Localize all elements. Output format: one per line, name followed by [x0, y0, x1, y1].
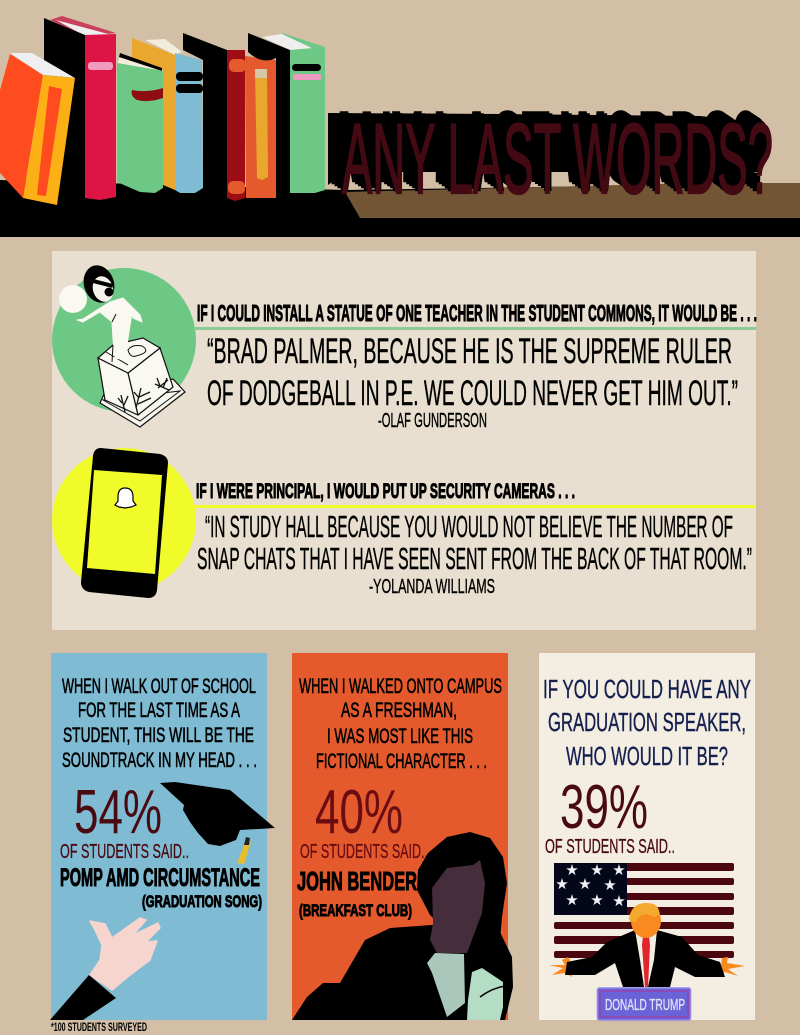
- footnote: *100 STUDENTS SURVEYED: [51, 1020, 147, 1034]
- question text: [62, 675, 257, 772]
- shelf: [0, 180, 800, 237]
- icon: american flag: ★: [565, 892, 579, 909]
- icon: american flag: ★: [612, 862, 626, 879]
- answer: POMP AMD CIRCUMSTANCE: [60, 864, 260, 892]
- question text: WHEN I WALKED ONTO CAMPUS: [299, 675, 502, 698]
- stat label: OF STUDENTS SAID..: [60, 841, 189, 863]
- question text: WHEN I WALK OUT OF SCHOOL: [62, 675, 256, 698]
- book: black and green: [248, 33, 325, 193]
- question text: AS A FRESHMAN,: [341, 699, 457, 722]
- illustration: Breakfast Club figure: [292, 832, 513, 1020]
- illustration: Donald Trump figure: [549, 903, 745, 1020]
- panel: quotes: [52, 251, 757, 630]
- icon: yellow circle with phone: [52, 448, 196, 598]
- book: black and crimson: [44, 16, 116, 200]
- statue head: [79, 261, 119, 307]
- answer: (GRADUATION SONG): [142, 892, 262, 911]
- icon: american flag: ★: [578, 876, 592, 893]
- answer: [297, 866, 417, 920]
- question text: [543, 674, 751, 771]
- book: green with red band: [117, 53, 163, 193]
- icon: american flag: ★: [590, 892, 604, 909]
- book: leaning orange: [0, 53, 75, 205]
- icon: american flag: ★: [555, 876, 569, 893]
- icon: american flag: ★: [612, 893, 626, 910]
- quote: Brad Palmer: -OLAF GUNDERSON: [378, 410, 487, 432]
- panel: graduation speaker card: [539, 653, 755, 1020]
- quote: Yolanda Williams: -YOLANDA WILLIAMS: [369, 576, 495, 598]
- statue plinth: [100, 379, 185, 427]
- book: black and dark red: [183, 33, 246, 201]
- book: orange with yellow band: [245, 56, 276, 198]
- question text: STUDENT, THIS WILL BE THE: [63, 724, 254, 747]
- stat label: OF STUDENTS SAID..: [300, 841, 428, 863]
- icon: row of books: [0, 16, 325, 205]
- name plate: [598, 988, 690, 1020]
- question text: FOR THE LAST TIME AS A: [78, 699, 240, 722]
- icon: graduation cap: [160, 782, 275, 864]
- panel: freshman character card: [292, 653, 513, 1020]
- stat label: OF STUDENTS SAID..: [545, 836, 675, 858]
- question text: FICTIONAL CHARACTER . . .: [316, 750, 487, 773]
- book: orange-yellow with blue spine: [132, 38, 203, 193]
- stat: 40%: 40%: [315, 778, 403, 847]
- panel: soundtrack card: [50, 653, 275, 1020]
- name plate: DONALD TRUMP: [605, 997, 685, 1014]
- icon: green circle with statue: [52, 261, 196, 427]
- answer: JOHN BENDER: [297, 866, 417, 896]
- quote: Yolanda Williams: [197, 509, 752, 598]
- stat: 39%: 39%: [560, 773, 648, 842]
- icon: american flag: ★: [565, 862, 579, 879]
- icon: american flag: [554, 862, 734, 958]
- question text: SOUNDTRACK IN MY HEAD . . .: [62, 749, 257, 772]
- icon: american flag: ★: [590, 862, 604, 879]
- statue figure: [77, 298, 142, 360]
- icon: tossing hand: [50, 918, 160, 1020]
- icon: american flag: ★: [603, 877, 617, 894]
- icon: snapchat ghost: [115, 488, 136, 508]
- stat: 54%: 54%: [74, 778, 162, 847]
- quote: Brad Palmer: [207, 332, 738, 432]
- answer: [60, 864, 262, 911]
- answer: (BREAKFAST CLUB): [299, 901, 412, 920]
- question text: [299, 675, 502, 773]
- question text: I WAS MOST LIKE THIS: [327, 725, 473, 748]
